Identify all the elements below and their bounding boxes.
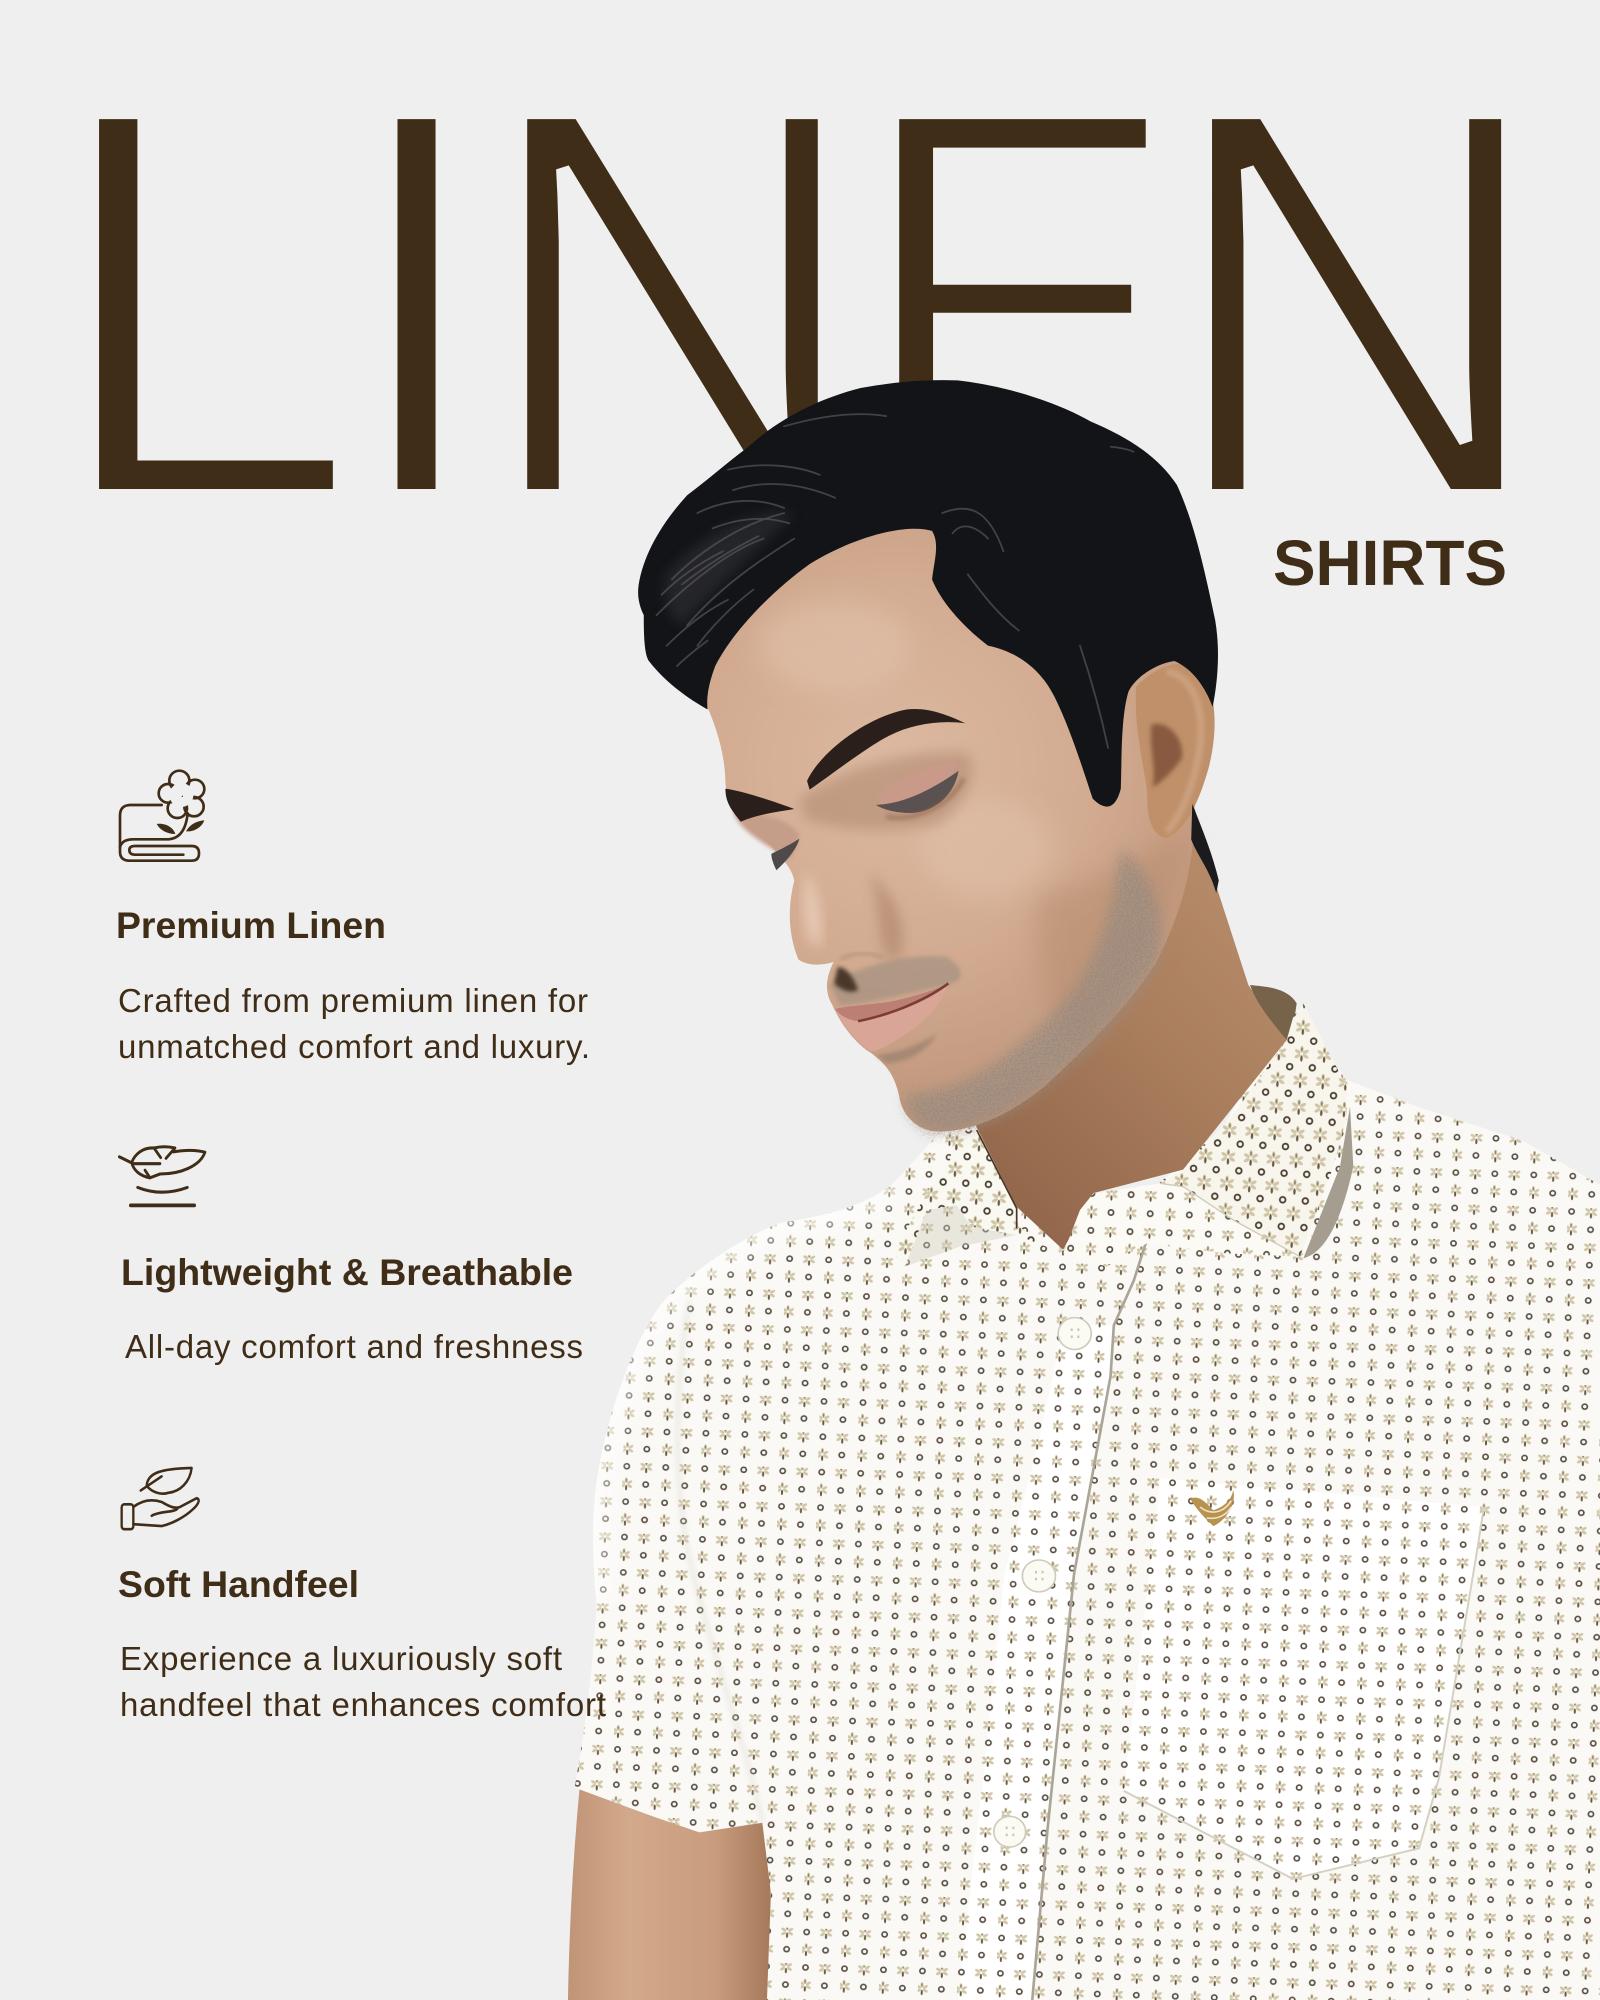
heading: Premium Linen (116, 905, 386, 946)
shirt body (575, 1000, 1600, 2000)
heading: Soft Handfeel (118, 1564, 359, 1605)
feature: Premium Linen (116, 771, 590, 1065)
collar stand line (977, 1130, 1017, 1228)
collar (893, 985, 1353, 1267)
jaw shading (1037, 829, 1187, 1049)
nape hair (1191, 804, 1219, 893)
photo: man in printed linen shirt (568, 380, 1600, 2000)
title: LINEN: L (46, 0, 359, 615)
description (118, 982, 590, 1065)
face (702, 462, 1195, 1131)
collar shadow (1303, 1107, 1353, 1258)
description: Experience a luxuriously soft (120, 1640, 562, 1677)
right collar (1160, 1003, 1347, 1257)
chin shadow (876, 1033, 937, 1063)
description: Crafted from premium linen for (118, 982, 588, 1019)
icon: towel with flower (120, 771, 204, 861)
collar lower edge (1160, 1183, 1300, 1257)
hair highlights (657, 414, 1134, 748)
pocket outline (1124, 1507, 1484, 1879)
shoulder and sleeve highlight (593, 1185, 892, 1606)
title: LINEN: I (339, 0, 494, 615)
hair sheen (665, 512, 794, 625)
right eye (876, 761, 964, 818)
nose shading (871, 870, 903, 962)
title: LINEN: N (1161, 0, 1552, 615)
title: LINEN: N (476, 0, 869, 614)
neck (937, 809, 1287, 1250)
right eyebrow (807, 709, 965, 790)
left collar (893, 1130, 1063, 1267)
pocket (1124, 1478, 1484, 1879)
title: LINEN: E (852, 0, 1183, 614)
inner collar back (1250, 985, 1297, 1040)
buttons (994, 1318, 1091, 1847)
arm (568, 1784, 772, 2000)
lips (835, 983, 948, 1051)
icon: hand with leaf (122, 1468, 199, 1529)
head (638, 380, 1219, 1131)
cheek highlight (922, 799, 1054, 901)
placket band (958, 1325, 1114, 2000)
moustache (830, 956, 961, 1005)
eye socket shading (799, 752, 973, 831)
sleeve seam (678, 1300, 763, 1823)
ear (1136, 664, 1215, 838)
icon: feather (119, 1147, 205, 1205)
under-collar shade (905, 1205, 1017, 1267)
left eyebrow (725, 789, 794, 822)
description: unmatched comfort and luxury. (118, 1028, 590, 1065)
title: LINEN (46, 0, 1552, 615)
feature: Soft Handfeel (118, 1468, 606, 1723)
feature: Lightweight & Breathable (119, 1147, 583, 1365)
stubble speckle (907, 850, 1160, 1131)
hair (638, 380, 1218, 807)
forehead highlight (759, 600, 912, 692)
description: handfeel that enhances comfort (120, 1686, 606, 1723)
description (120, 1640, 606, 1723)
subtitle: SHIRTS: SHIRTS (1273, 527, 1507, 599)
heading: Lightweight & Breathable (121, 1252, 573, 1293)
placket edge (1032, 1198, 1160, 2000)
description: All-day comfort and freshness (125, 1328, 583, 1365)
stubble wash (907, 850, 1160, 1131)
fabric print (575, 1000, 1600, 2000)
collar front fold (1063, 1183, 1300, 1267)
logo: bird (1190, 1490, 1234, 1526)
left eye (771, 839, 799, 870)
